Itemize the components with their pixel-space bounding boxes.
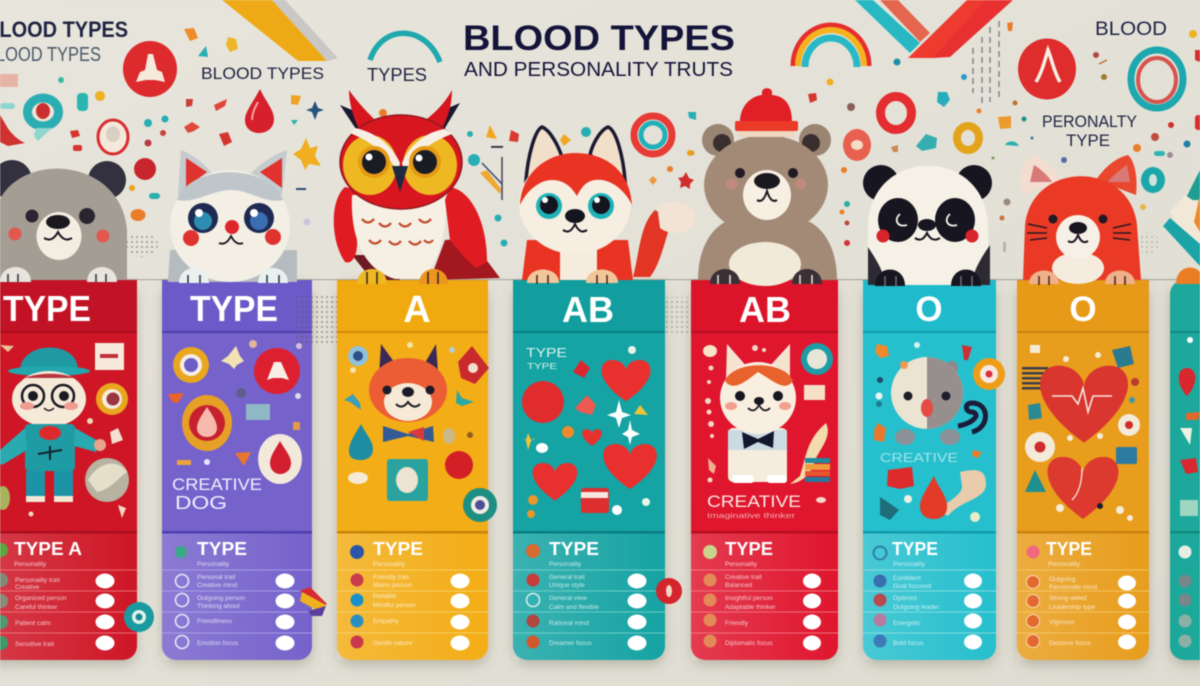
card 7 blue blocks [1025,346,1137,492]
card 7 stripes [1022,367,1048,390]
icon: teal ring on card 3 edge [463,488,497,522]
title [463,19,735,81]
label: blood: BLOOD [1095,19,1167,40]
dashed lines decoration [973,21,999,103]
card 4 text: TYPE [527,362,557,371]
card 5 details list: Personality [725,561,758,568]
card 6 details list: Outgoing leader [893,604,940,611]
card 7 heartbeat heart [1040,366,1128,443]
animal: brown bear with red hat [698,88,837,286]
card 3 blue disc [348,346,368,366]
card 5 teal ring [801,343,833,375]
divider shelf line [0,279,1200,280]
card 3 fox head [369,344,447,442]
card 5 details list: TYPE [725,538,773,559]
card 7 details list: TYPE [1046,538,1092,559]
label: personality type: PERONALTY [1042,112,1137,131]
animal: gray bear [0,160,127,282]
card 4 header [513,280,665,333]
card 5 cream rect [804,385,825,400]
panel: card 5 red [691,280,838,660]
card 1 character: boy with hat [0,348,106,502]
card 7 details list: Leadership type [1049,604,1096,611]
card 6 header [863,280,996,333]
panel: card 2 purple [162,280,337,660]
card 2 details list: Creative mind [197,582,237,589]
icon: red badge between cards [656,578,682,604]
card 2 details list: Friendliness [197,618,233,625]
card 2 gold drop badge [182,395,232,451]
card 2 star [221,346,244,369]
label: blood types: BLOOD TYPES [201,65,324,83]
card 4 details list: Calm and flexible [549,604,599,611]
card 1 details list: Organized person [15,595,67,602]
card 2 details list [162,531,312,660]
card 2 details list: TYPE [197,538,247,559]
card 6 header: O [915,290,943,329]
title: AND PERSONALITY TRUTS [464,59,733,81]
card 1 details list: TYPE A [14,538,82,559]
card 3 details list: TYPE [373,538,423,559]
card 4 details list: General trait [549,574,585,581]
card 5 text: creative: CREATIVE [707,492,801,511]
card 7 details list [1017,531,1149,660]
decorative ribbons: top left [222,0,338,61]
card 3 details list: Empathy [373,618,399,625]
card 1 details list: Creative [15,584,40,591]
card 4 header: AB [562,289,614,330]
card 2 header: TYPE [190,288,278,329]
card 4 details list: General view [549,595,587,602]
card 2 details list: Thinking about [197,603,240,610]
icon: yellow ring [957,126,979,150]
card 2 small marks [168,340,302,466]
card 7 header: O [1069,290,1097,329]
animal: red cat [1020,155,1141,285]
card 3 details list: Reliable [373,593,397,600]
card 3 header [337,280,488,333]
card 5 header: AB [739,289,791,330]
card 5 details list: Insightful person [725,595,773,602]
card 7 header [1017,280,1149,333]
card 6 details list [863,531,996,660]
card 2 blue card [246,404,270,420]
icon: red white ring left [98,120,128,154]
card 6 details list: Confident [893,575,921,582]
panel: card 4 teal [513,280,691,660]
card 2 details list: Personal trait [197,574,235,581]
card 4 details list: TYPE [549,538,599,559]
card 7 details list: Decisive focus [1049,640,1092,647]
animal: red fox [519,127,695,284]
card 6 details list: Personality [893,561,926,568]
card 1 details list [0,531,137,660]
label: left blood types [0,17,128,66]
card 1 details list: Sensitive trait [15,641,54,648]
card 4 small marks [523,346,650,518]
card 4 hearts [533,360,657,500]
card 6 small marks [874,342,982,522]
icon: teal ring on card 1 edge [124,602,154,632]
card 3 red diamond [458,346,489,384]
card 4 text [526,346,567,371]
icon: red badge left [134,158,156,180]
card 5 header [691,280,838,333]
card 5 details list: Friendly [725,620,749,627]
card 4 red ball [522,381,564,423]
icon: red ring [880,96,912,130]
card 7 details list: Outgoing [1049,576,1076,583]
card 4 text: TYPE [526,346,567,360]
label: personality type: TYPE [1066,131,1110,150]
icon: rainbow [793,25,869,67]
animal: partial teal and orange shape [1163,170,1200,284]
card 4 details list: Unique style [549,582,585,589]
card 5 stripes [805,458,830,482]
card 2 text: creative dog: DOG [175,493,227,513]
decorative ribbons: top right [855,0,1013,58]
card 7 details list: Passionate mind [1049,584,1097,591]
card 3 small marks [344,342,474,484]
card 3 details list: Personality [373,561,406,568]
animal: panda [863,165,992,286]
halftone dots [126,232,1159,257]
card 4 details list: Personality [549,561,582,568]
card 6 details list: TYPE [892,538,938,559]
card 5 details list: Adaptable thinker [725,604,776,611]
card 2 egg drop [258,434,302,484]
card 7 small marks [1030,345,1139,521]
card 4 details list: Dreamer focus [549,640,592,647]
card 6 details list: Energetic [893,620,921,627]
card 2 header [162,280,312,333]
card 1 details list: Personality [14,561,47,568]
card 6 text: creative: CREATIVE [880,450,958,465]
card 6 details list: Optimist [893,595,917,602]
icon: pink disc [843,129,871,161]
card 3 details list: Friendly trait [373,574,409,581]
card 2 halftone [293,296,337,346]
icon: dark blue sparkle [306,101,324,120]
card 4 halftone [665,297,691,333]
card 1 rock [85,458,129,502]
panel: card 1 red [0,280,137,660]
card 1 header [0,280,137,333]
icon: red A circle left [123,41,177,97]
icon: orange star [293,138,321,170]
card 1 details list: Personality trait [15,577,60,584]
card 5 details list: Diplomatic focus [725,640,773,647]
card 4 red rect [581,488,609,513]
card 3 header: A [403,289,431,331]
icon: red A circle right [1018,38,1076,100]
card 2 details list: Personality [197,561,230,568]
icon: teal small ring right [1141,167,1165,193]
panel: card 3 yellow [337,280,489,660]
icon: teal ring right [1131,50,1183,108]
animal: gray cat [168,150,297,283]
card 2 details list: Emotion focus [197,640,239,647]
card 5 details list: Creative trait [725,574,762,581]
card 2 gear ring [173,347,209,383]
card 1 details list: Careful thinker [15,604,58,611]
label: types: TYPES [367,65,427,85]
animal: red owl [334,90,500,284]
icon: colored ring center [634,116,672,154]
panel: card 7 orange [1017,280,1149,660]
card 6 red block [887,467,914,489]
card 3 details list: Gentle nature [373,640,413,647]
icon: teal pin ring left [28,98,58,141]
card 4 details list [513,531,665,660]
card 3 details list: Mindful person [373,602,416,609]
card 7 details list: Strong-willed [1049,595,1087,602]
card 5 details list: Balanced [725,582,752,589]
card 6 details list: Goal focused [893,583,932,590]
label: personality type [1042,112,1137,150]
icon: blood drop [245,89,274,133]
card 1 details list: Patient calm [15,620,51,627]
card 2 text: creative dog [172,475,262,513]
card 1 note card [95,343,124,370]
title: BLOOD TYPES [463,19,735,58]
icon: teal arc [370,33,440,62]
card 2 red A badge [254,348,300,394]
card 3 details list: Warm person [373,582,412,589]
card 1 small marks [0,345,126,518]
card 6 critter [891,357,986,445]
card 7 lower heart [1048,457,1118,519]
card 3 teal square [387,459,428,501]
card 3 teal drop [349,424,373,460]
card 5 text: creative: Imaginative thinker [707,511,796,520]
card 5 text: creative [707,492,801,520]
card 7 details list: Vigorous [1049,619,1075,626]
icon: orange ring on card 6 edge [973,358,1005,390]
card 4 details list: Rational mind [549,620,589,627]
card 2 text: creative dog: CREATIVE [172,475,262,494]
card 2 details list: Outgoing person [197,595,245,602]
panel: card 8 teal partial [1170,280,1200,660]
card 5 cat with bowtie [720,344,828,484]
card 1 gold gear badge [96,383,128,415]
card 3 details list [337,531,488,660]
card 5 small marks [703,345,826,503]
card 6 details list: Bold focus [893,640,924,647]
card 5 details list [691,531,838,660]
card 6 drop and swoop [920,470,986,519]
confetti [0,22,1200,252]
icon: multicolor ball [300,587,327,616]
icon: red shape far left [0,115,25,146]
panel: card 6 cyan [863,280,996,660]
card 7 white discs [1025,414,1140,462]
card 3 red ball [445,451,473,479]
card 1 header: TYPE [3,288,91,329]
card 7 details list: Personality [1048,561,1081,568]
